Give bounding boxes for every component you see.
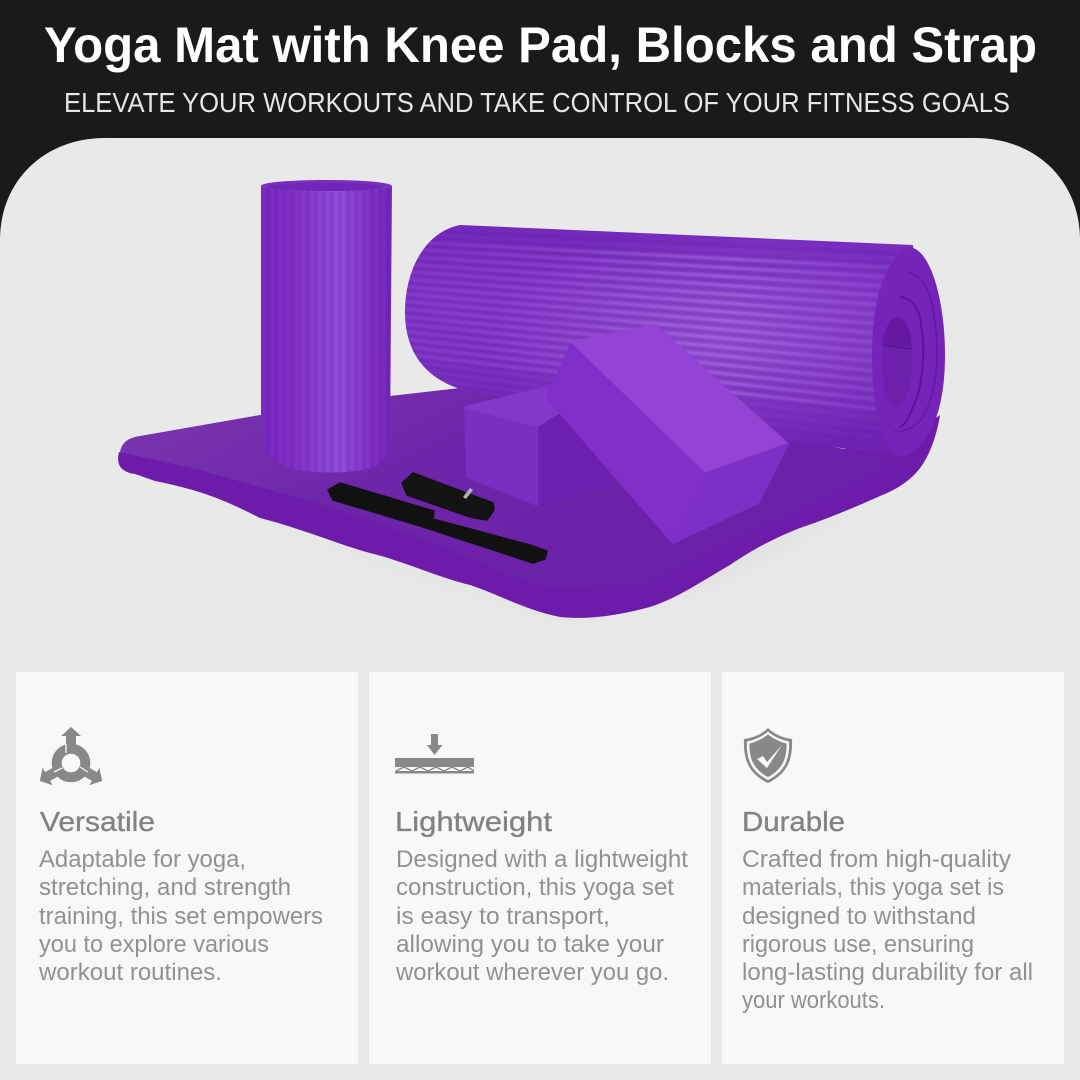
text: versatile body: Adaptable for yoga, bbox=[39, 846, 246, 873]
text: durable body: rigorous use, ensuring bbox=[742, 931, 974, 958]
heading: versatile: Versatile bbox=[40, 806, 155, 837]
product illustration: yoga set bbox=[118, 180, 945, 622]
mat shadow bbox=[130, 478, 900, 622]
flat yoga mat bbox=[118, 388, 940, 618]
text: versatile body: workout routines. bbox=[38, 959, 222, 986]
text: durable body: designed to withstand bbox=[742, 903, 976, 930]
panel: versatile bbox=[16, 672, 358, 1064]
text: lightweight body: is easy to transport, bbox=[396, 903, 610, 930]
text: versatile body: training, this set empowers bbox=[39, 903, 323, 930]
text: lightweight body: construction, this yoga set bbox=[396, 874, 674, 901]
text: durable body: your workouts. bbox=[742, 987, 885, 1014]
text: lightweight body: allowing you to take your bbox=[396, 931, 664, 958]
icon: three-way arrows bbox=[35, 727, 107, 790]
header background bbox=[0, 0, 1080, 240]
text: durable body: Crafted from high-quality bbox=[742, 846, 1011, 873]
back yoga block bbox=[465, 387, 610, 505]
text: durable body: long-lasting durability for all bbox=[742, 959, 1033, 986]
text: versatile body: you to explore various bbox=[39, 931, 269, 958]
subtitle: ELEVATE YOUR WORKOUTS AND TAKE CONTROL OF YOUR FITNESS GOALS bbox=[64, 87, 1010, 118]
text: durable body bbox=[742, 846, 1033, 1014]
text: versatile body: stretching, and strength bbox=[39, 874, 291, 901]
text: versatile body bbox=[38, 846, 323, 986]
title: Yoga Mat with Knee Pad, Blocks and Strap bbox=[44, 17, 1037, 73]
rolled mat bbox=[400, 225, 945, 457]
text: lightweight body: Designed with a lightweight bbox=[396, 846, 688, 873]
heading: durable: Durable bbox=[742, 806, 845, 837]
heading: lightweight: Lightweight bbox=[395, 806, 552, 837]
text: lightweight body bbox=[395, 846, 688, 986]
panel: lightweight bbox=[369, 672, 711, 1064]
icon: shield with check bbox=[744, 728, 792, 783]
knee pad bbox=[261, 180, 392, 474]
roll end face bbox=[872, 247, 945, 457]
text: durable body: materials, this yoga set is bbox=[742, 874, 1004, 901]
icon: compression arrow bbox=[395, 734, 474, 774]
strap bbox=[328, 473, 547, 563]
front yoga block bbox=[547, 325, 788, 543]
panel: durable bbox=[722, 672, 1064, 1064]
text: lightweight body: workout wherever you go. bbox=[395, 959, 669, 986]
